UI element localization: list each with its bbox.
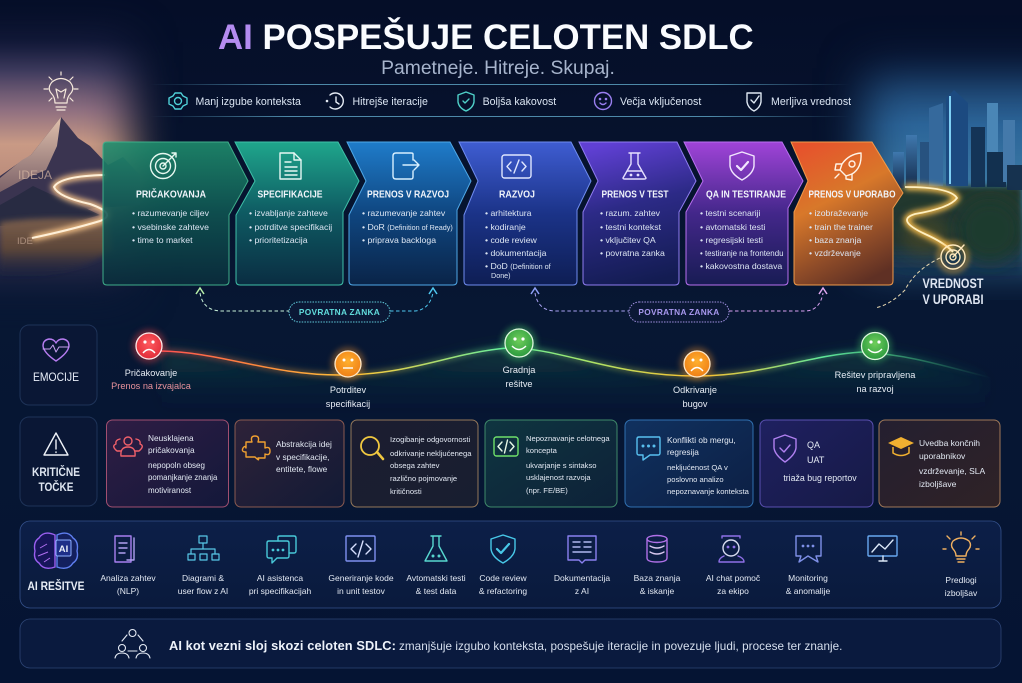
critical points label box: TOČKE (38, 479, 74, 494)
item: diagrams (178, 536, 228, 596)
panel: Prenos v razvoj: PRENOS V RAZVOJ (367, 190, 449, 200)
item: AI chat (706, 536, 761, 596)
critical card: responsibility: kritičnosti (390, 487, 422, 496)
item: knowledge base: Baza znanja (634, 573, 681, 583)
critical card: expectations: nepopoln obseg (148, 461, 205, 470)
item: documentation (554, 536, 610, 596)
emotion: sad bugs: bugov (682, 399, 708, 409)
emotion: sad bugs: Odkrivanje (673, 385, 717, 395)
list: • regresijski testi (700, 235, 763, 245)
list: • izvabljanje zahteve (249, 208, 328, 218)
emotions label box: EMOCIJE (33, 370, 79, 384)
critical card: QA UAT: UAT (807, 455, 825, 465)
list: • testni kontekst (600, 222, 662, 232)
icon: chat (637, 437, 660, 460)
panel: Razvoj: RAZVOJ (499, 190, 535, 200)
critical card: adoption: izboljšave (919, 479, 957, 489)
icon: code (502, 155, 531, 178)
critical card: responsibility (351, 420, 478, 507)
title: AI POSPEŠUJE CELOTEN SDLC (218, 17, 754, 57)
label: value in use: VREDNOST (922, 276, 984, 291)
panel: Prenos v uporabo (791, 142, 903, 285)
item: code generation: Generiranje kode (328, 573, 394, 583)
critical card: conflicts: Konflikti ob mergu, (667, 435, 736, 445)
feedback loop: left (196, 288, 437, 322)
icon: connected people (115, 630, 150, 658)
list: • razum. zahtev (600, 208, 661, 218)
benefit: inclusion: Večja vključenost (620, 96, 701, 108)
icon: flask (623, 153, 646, 179)
feedback loop: right: POVRATNA ZANKA (638, 307, 720, 317)
list: Done) (491, 271, 511, 280)
item: monitoring (786, 536, 830, 596)
list: • testiranje na frontendu (700, 249, 783, 258)
item: assistance (249, 536, 311, 596)
list: • DoR (Definition of Ready) (362, 222, 453, 232)
item: assistance: AI asistenca (257, 573, 303, 583)
list (362, 208, 453, 245)
list (249, 208, 332, 245)
item: improvements: izboljšav (945, 588, 978, 598)
item: code generation: in unit testov (337, 586, 386, 596)
list: • razumevanje ciljev (132, 208, 210, 218)
critical card: expectations: pomanjkanje znanja (148, 473, 218, 482)
list: • vsebinske zahteve (132, 222, 209, 232)
emotion: sad start (111, 329, 192, 391)
list: • kodiranje (485, 222, 526, 232)
critical card: concept: usklajenost razvoja (526, 473, 591, 482)
list: • izobraževanje (809, 208, 868, 218)
list (600, 208, 665, 258)
critical card: abstraction: v specifikacije, (276, 452, 330, 462)
emotion: sad start: Pričakovanje (125, 368, 177, 378)
item: improvements: Predlogi (945, 575, 977, 585)
critical card: QA UAT (760, 420, 873, 507)
label: value in use: V UPORABI (922, 292, 984, 307)
item: knowledge base: & iskanje (640, 586, 675, 596)
critical card: responsibility: obsega zahtev (390, 461, 440, 470)
list: • testni scenariji (700, 208, 761, 218)
benefit: value: Merljiva vrednost (771, 96, 851, 108)
list: • potrditve specifikacij (249, 222, 332, 232)
item: documentation: z AI (575, 586, 589, 596)
benefit: value (747, 93, 851, 111)
critical card: QA UAT: triaža bug reportov (783, 473, 857, 483)
item: monitoring: & anomalije (786, 586, 830, 596)
item: code generation (328, 536, 394, 596)
icon: target value (939, 243, 967, 271)
item: automated tests: & test data (416, 586, 457, 596)
critical card: concept: ukvarjanje s sintakso (526, 461, 596, 470)
item: knowledge base (634, 536, 681, 596)
critical card: conflicts (625, 420, 753, 507)
icon: magnifier (361, 437, 383, 459)
panel: Razvoj (459, 142, 591, 285)
critical card: responsibility: odkrivanje nekljućenega (390, 449, 472, 458)
panel: Prenos v razvoj (347, 142, 471, 285)
list: • code review (485, 235, 538, 245)
critical card: abstraction (235, 420, 344, 507)
panel: AI solutions: AI REŠITVE (28, 578, 84, 593)
subtitle: Pametneje. Hitreje. Skupaj. (381, 58, 615, 79)
critical card: concept: (npr. FE/BE) (526, 486, 568, 495)
list: • prioritetizacija (249, 235, 308, 245)
panel: Specifikacije: SPECIFIKACIJE (258, 190, 323, 200)
feedback loop: left: POVRATNA ZANKA (299, 307, 380, 317)
list: • DoD (Definition of (485, 261, 551, 271)
panel: QA in testiranje (684, 142, 803, 285)
icon: puzzle (242, 436, 270, 460)
emotion: happy solution: Rešitev pripravljena (835, 370, 916, 380)
list: • arhitektura (485, 208, 532, 218)
icon: handoff (393, 153, 419, 179)
emotion: sad start: Prenos na izvajalca (111, 381, 192, 391)
item: diagrams: Diagrami & (182, 573, 224, 583)
critical card: expectations: pričakovanja (148, 445, 195, 455)
item: diagrams: user flow z AI (178, 586, 228, 596)
illustration: mountain with idea path: IDEJA (18, 168, 52, 182)
panel: bottom statement: zmanjšuje izgubo konteksta, pospešuje iteracije in povezuje ljudi, procese ter znanje. (399, 640, 842, 653)
benefit: inclusion (594, 92, 701, 110)
critical card: concept (485, 420, 617, 507)
list: • time to market (132, 235, 193, 245)
list: • train the trainer (809, 222, 873, 232)
icon: shield (730, 152, 754, 180)
icon: graduation cap (888, 437, 914, 456)
emotions label box (20, 325, 97, 405)
label: value in use (922, 276, 984, 307)
benefit: iterations (326, 93, 428, 109)
icon: target (150, 153, 176, 178)
item: code review (479, 535, 527, 596)
list: • vzdrževanje (809, 248, 861, 258)
benefits bar (150, 84, 851, 117)
item: AI chat: za ekipo (717, 586, 749, 596)
panel: QA in testiranje: QA IN TESTIRANJE (706, 190, 786, 200)
item: analysis: Analiza zahtev (100, 573, 156, 583)
emotion: sad bugs (673, 347, 717, 409)
critical card: abstraction: Abstrakcija idej (276, 439, 332, 449)
item: chart monitor (868, 536, 897, 561)
critical card: responsibility: različno pojmovanje (390, 474, 457, 483)
item: AI chat: AI chat pomoč (706, 573, 761, 583)
benefit: quality: Boljša kakovost (483, 96, 556, 108)
critical card: conflicts: nepoznavanje konteksta (667, 487, 750, 496)
icon: warning (44, 433, 68, 455)
icon: shield (774, 435, 796, 462)
critical card: conflicts: poslovno analizo (667, 475, 724, 484)
critical points label box (20, 417, 97, 506)
emotion: neutral: specifikacij (326, 399, 370, 409)
emotion: happy: rešitve (505, 379, 533, 389)
critical points label box: KRITIČNE (32, 464, 80, 479)
list: • baza znanja (809, 235, 861, 245)
item: assistance: pri specifikacijah (249, 586, 311, 596)
critical card: abstraction: entitete, flowe (276, 464, 328, 474)
dashed path to value (875, 258, 940, 308)
panel: Prenos v uporabo: PRENOS V UPORABO (808, 190, 896, 200)
panel: AI solutions (20, 521, 1001, 608)
panel: bottom statement: AI kot vezni sloj skozi celoten SDLC: (169, 638, 396, 653)
item: code review: & refactoring (479, 586, 527, 596)
item: documentation: Dokumentacija (554, 573, 610, 583)
icon: AI brain (34, 533, 78, 568)
item: automated tests (406, 536, 466, 596)
emotion curve (161, 348, 992, 415)
critical card: expectations (106, 420, 228, 507)
panel: Specifikacije (235, 142, 359, 285)
glowing path (32, 175, 107, 238)
critical card: adoption: vzdrževanje, SLA (919, 466, 985, 476)
icon: people (114, 437, 142, 456)
icon: document (280, 153, 301, 179)
item: improvements (943, 532, 979, 598)
emotion: happy: Gradnja (503, 365, 536, 375)
critical card: expectations: Neusklajena (148, 433, 194, 443)
critical card: conflicts: regresija (667, 447, 699, 457)
emotion: neutral: Potrditev (330, 385, 367, 395)
item: analysis (100, 536, 156, 596)
list: • povratna zanka (600, 248, 665, 258)
list: • dokumentacija (485, 248, 547, 258)
critical card: adoption: uporabnikov (919, 451, 966, 461)
list (809, 208, 873, 258)
item: automated tests: Avtomatski testi (406, 573, 466, 583)
item: analysis: (NLP) (117, 586, 139, 596)
benefit: quality (458, 92, 556, 111)
icon: heart (43, 339, 69, 361)
emotion: happy (501, 325, 537, 389)
benefit: context: Manj izgube konteksta (196, 96, 301, 108)
benefit: context (169, 93, 301, 109)
panel: Pričakovanja (103, 142, 248, 285)
icon: rocket (835, 153, 861, 180)
icon: light bulb (44, 72, 78, 110)
icon: AI brain: AI (59, 544, 68, 555)
glowing path (905, 187, 957, 252)
critical card: responsibility: Izogibanje odgovornosti (390, 435, 471, 444)
list: • kakovostna dostava (700, 261, 782, 271)
emotion: happy solution (835, 329, 916, 394)
list (132, 208, 210, 245)
critical card: QA UAT: QA (807, 440, 820, 450)
list: • avtomatski testi (700, 222, 765, 232)
list (700, 208, 783, 271)
benefit: iterations: Hitrejše iteracije (352, 96, 428, 108)
item: code review: Code review (479, 573, 527, 583)
icon: code (494, 437, 518, 456)
list: • razumevanje zahtev (362, 208, 446, 218)
illustration: city with value path (836, 49, 1022, 294)
critical card: adoption: Uvedba končnih (919, 438, 980, 448)
critical card: concept: koncepta (526, 446, 558, 455)
critical card: conflicts: nekljućenost QA v (667, 463, 728, 472)
panel: Prenos v test (579, 142, 696, 285)
panel: Pričakovanja: PRIČAKOVANJA (136, 188, 206, 200)
emotion: neutral (326, 347, 370, 409)
critical card: expectations: motiviranost (148, 486, 192, 495)
list (485, 208, 551, 280)
feedback loop: right (531, 288, 827, 322)
illustration: mountain with idea path: IDE (17, 236, 33, 247)
list: • vključitev QA (600, 235, 656, 245)
panel: bottom statement (20, 619, 1001, 668)
critical card: adoption (879, 420, 1000, 507)
item: monitoring: Monitoring (788, 573, 828, 583)
critical card: concept: Nepoznavanje celotnega (526, 434, 610, 443)
panel: Prenos v test: PRENOS V TEST (602, 190, 669, 200)
emotion: happy solution: na razvoj (856, 384, 894, 394)
illustration: mountain with idea path (0, 31, 164, 290)
list: • priprava backloga (362, 235, 436, 245)
